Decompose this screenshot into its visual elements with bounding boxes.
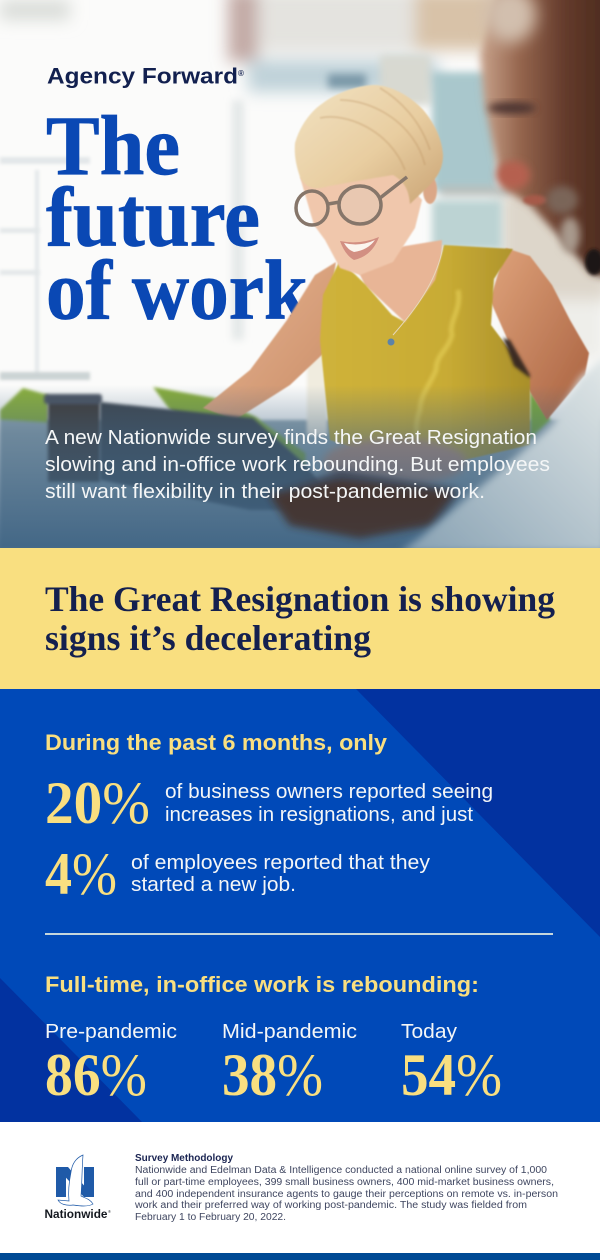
survey methodology text: full or part-time employees, 399 small business owners, 400 mid-market business owners, [135, 1177, 554, 1188]
man at right [480, 0, 600, 278]
stat: mid-pandemic: Mid-pandemic [222, 1021, 357, 1043]
photo: people [203, 0, 600, 470]
necklace [393, 245, 443, 335]
smile [340, 237, 379, 260]
survey methodology text: Nationwide and Edelman Data & Intelligence conducted a national online survey of 1,000 [135, 1165, 547, 1176]
title: The [46, 99, 180, 193]
stat: 20% [45, 770, 493, 836]
survey methodology text: February 1 to February 20, 2022. [135, 1212, 286, 1223]
panel: blue statistics [0, 689, 600, 1122]
blouse [320, 245, 530, 470]
stat: today: Today [401, 1021, 457, 1043]
logo: Nationwide [44, 1155, 111, 1221]
stat: 20%: of business owners reported seeing [165, 780, 493, 803]
stat: 20%: increases in resignations, and just [165, 803, 473, 826]
glasses [296, 177, 407, 225]
face [300, 170, 422, 275]
intro text [45, 427, 550, 503]
title [46, 99, 309, 338]
ear [423, 176, 437, 204]
foreground table, tablet and hands [0, 355, 600, 552]
desk and plants [0, 350, 600, 548]
heading: The Great Resignation is showing [45, 579, 555, 619]
intro text: still want flexibility in their post-pandemic work. [45, 481, 485, 503]
stat: mid-pandemic [222, 1021, 357, 1108]
stat: 4% [45, 841, 431, 907]
title: future [46, 170, 260, 264]
stat: today: 54% [401, 1042, 502, 1108]
stat: pre-pandemic [45, 1021, 177, 1108]
subheading: past 6 months: During the past 6 months, only [45, 730, 388, 755]
hero photo background [0, 0, 600, 548]
neck and chest [350, 240, 442, 325]
stat: mid-pandemic: 38% [222, 1042, 323, 1108]
logo: Nationwide: Nationwide [44, 1209, 108, 1221]
left arm [203, 262, 336, 420]
footer bar [0, 1253, 600, 1260]
stat: 20%: 20% [45, 770, 150, 836]
survey methodology text: Survey Methodology [135, 1153, 233, 1164]
right arm [490, 248, 589, 420]
stat: pre-pandemic: Pre-pandemic [45, 1021, 177, 1043]
heading: signs it’s decelerating [45, 618, 371, 658]
stat: 4%: of employees reported that they [131, 851, 431, 874]
survey methodology text: work and their preferred way of working post-pandemic. The study was fielded from [134, 1200, 527, 1211]
panel: footer [0, 1122, 600, 1253]
brand: Agency Forward: Agency Forward [47, 64, 238, 88]
brand: Agency Forward: ® [238, 69, 244, 78]
hair [295, 85, 443, 204]
panel: yellow heading band [0, 548, 600, 689]
survey methodology text: and 400 independent insurance agents to gauge their perceptions on remote vs. in-person [135, 1189, 558, 1200]
stat: 4%: started a new job. [131, 873, 296, 896]
man's shoulder [400, 355, 600, 552]
survey methodology text [134, 1153, 558, 1223]
blouse ruffle [416, 290, 459, 445]
subheading: rebounding: Full-time, in-office work is rebounding: [45, 972, 479, 997]
logo: Nationwide: ® [108, 1209, 111, 1214]
armhole shadow [503, 338, 530, 378]
intro text: A new Nationwide survey finds the Great Resignation [45, 427, 537, 449]
title: of work [46, 244, 309, 338]
hair strands [320, 88, 430, 170]
intro text: slowing and in-office work rebounding. But employees [45, 454, 550, 476]
stat: 4%: 4% [45, 841, 117, 907]
coffee cup [44, 394, 102, 482]
heading [45, 579, 555, 658]
stat: pre-pandemic: 86% [45, 1042, 147, 1108]
